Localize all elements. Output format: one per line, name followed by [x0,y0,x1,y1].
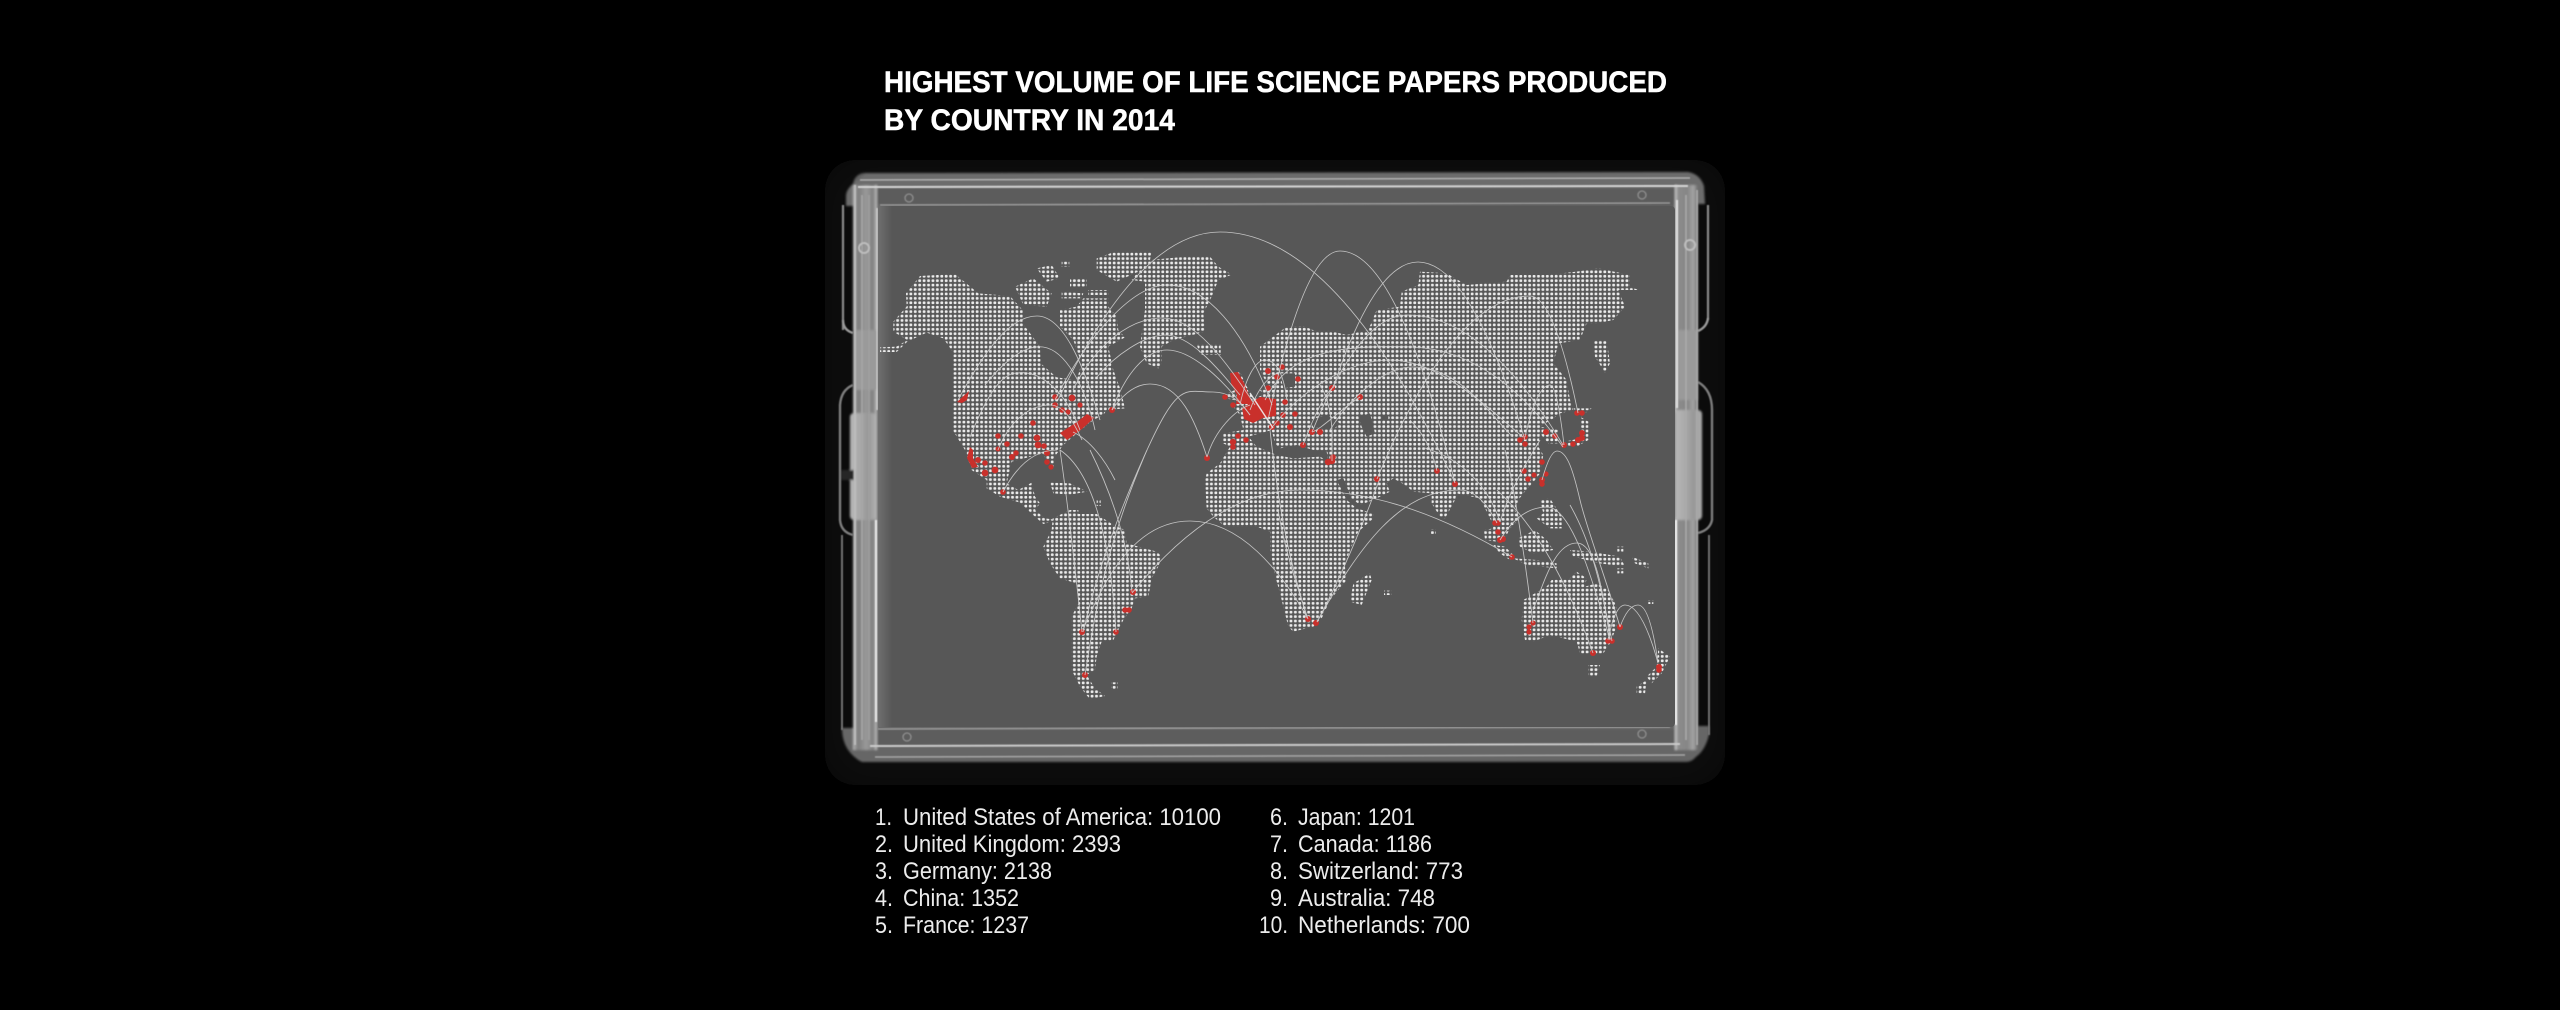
ranked list: countries 1 to 5: 2. [875,831,893,858]
title: BY COUNTRY IN 2014 [884,104,1175,137]
ranked list: countries 6 to 10: Australia: 748 [1298,885,1435,912]
ranked list: countries 6 to 10: 7. [1270,831,1288,858]
ranked list: countries 6 to 10: 9. [1270,885,1288,912]
title: HIGHEST VOLUME OF LIFE SCIENCE PAPERS PRODUCED [884,66,1667,99]
ranked list: countries 1 to 5: France: 1237 [903,912,1029,939]
red research city markers [957,364,1662,678]
panel: grey dish surface [878,206,1675,727]
ranked list: countries 6 to 10: Switzerland: 773 [1298,858,1463,885]
ranked list: countries 6 to 10: Netherlands: 700 [1298,912,1470,939]
ranked list: countries 1 to 5: United Kingdom: 2393 [903,831,1121,858]
ranked list: countries 1 to 5: China: 1352 [903,885,1019,912]
ranked list: countries 1 to 5: United States of America: 10100 [903,804,1221,831]
panel: petri dish tray frame [825,160,1725,785]
title [884,66,1667,137]
ranked list: countries 6 to 10: Canada: 1186 [1298,831,1432,858]
ranked list: countries 1 to 5: 1. [875,804,892,831]
ranked list: countries 1 to 5: 5. [875,912,893,939]
collaboration arcs [958,232,1658,675]
ranked list: countries 6 to 10 [1259,804,1470,939]
ranked list: countries 6 to 10: 6. [1270,804,1288,831]
world dot map [880,252,1670,700]
ranked list: countries 1 to 5: Germany: 2138 [903,858,1052,885]
ranked list: countries 6 to 10: 8. [1270,858,1288,885]
ranked list: countries 1 to 5: 4. [875,885,893,912]
ranked list: countries 1 to 5 [875,804,1221,939]
ranked list: countries 6 to 10: Japan: 1201 [1298,804,1415,831]
ranked list: countries 6 to 10: 10. [1259,912,1288,939]
ranked list: countries 1 to 5: 3. [875,858,893,885]
